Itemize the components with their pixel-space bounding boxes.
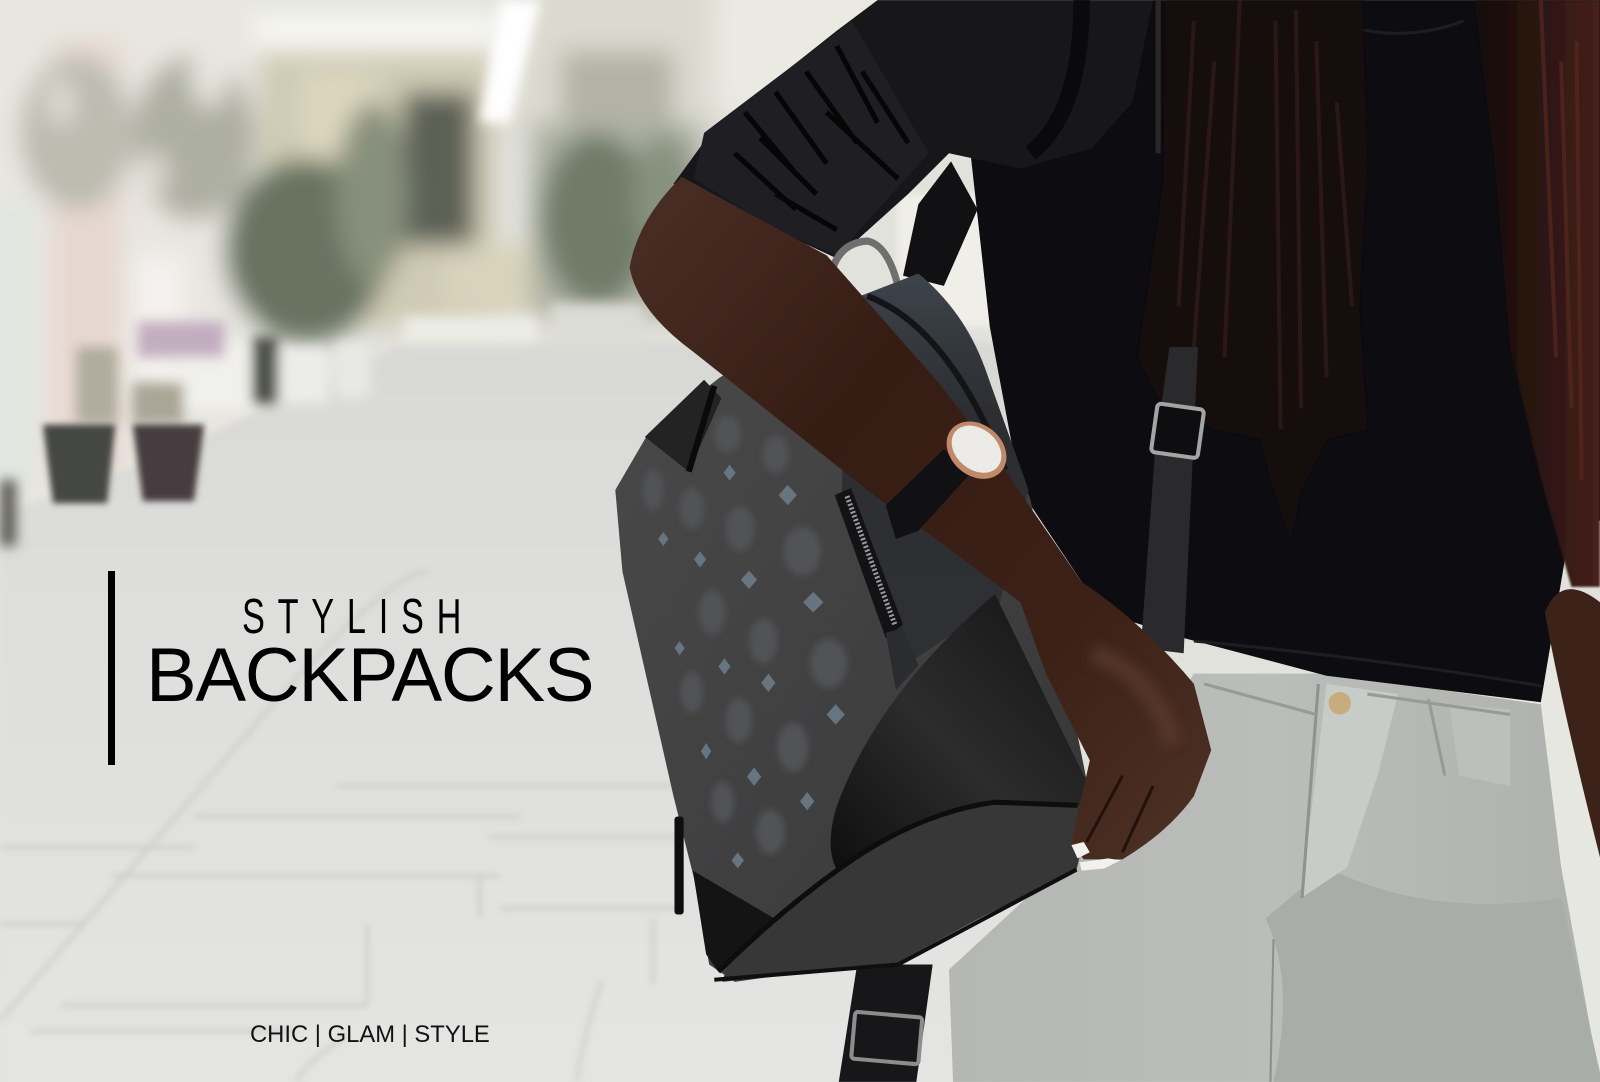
wristwatch [886, 410, 1018, 539]
long hair [1138, 0, 1600, 587]
monogram diamonds [658, 464, 845, 869]
flower pots [43, 425, 204, 503]
backpack [615, 274, 1094, 982]
sleeve [673, 0, 1153, 258]
crossbody strap with buckle [1141, 347, 1204, 653]
tagline: CHIC | GLAM | STYLE [250, 1021, 490, 1048]
arm and hand [630, 177, 1211, 871]
backpack handle and straps [829, 161, 978, 291]
backpack body [615, 274, 1092, 982]
jeans button [1329, 692, 1351, 714]
pavement [0, 342, 1020, 1082]
corner tab [645, 380, 721, 472]
bottom panel [722, 802, 1078, 982]
zipper [835, 488, 903, 638]
planters [0, 304, 643, 546]
strap: lower backpack strap [839, 964, 933, 1082]
fingernails [1071, 842, 1120, 871]
pavement cracks [0, 572, 694, 1082]
light streak [480, 0, 541, 123]
top: black shirt [969, 0, 1600, 702]
black leather gusset [831, 594, 1094, 870]
jeans [949, 674, 1600, 1082]
title: STYLISH: STYLISH [242, 590, 474, 644]
right background [898, 194, 1600, 1082]
pebbled top panel [842, 274, 1029, 663]
right forearm edge [1545, 589, 1600, 857]
thin upper shoulder strap [1156, 0, 1161, 153]
monogram motifs [643, 415, 847, 854]
title bar [108, 571, 115, 765]
title: BACKPACKS: BACKPACKS [146, 633, 593, 718]
